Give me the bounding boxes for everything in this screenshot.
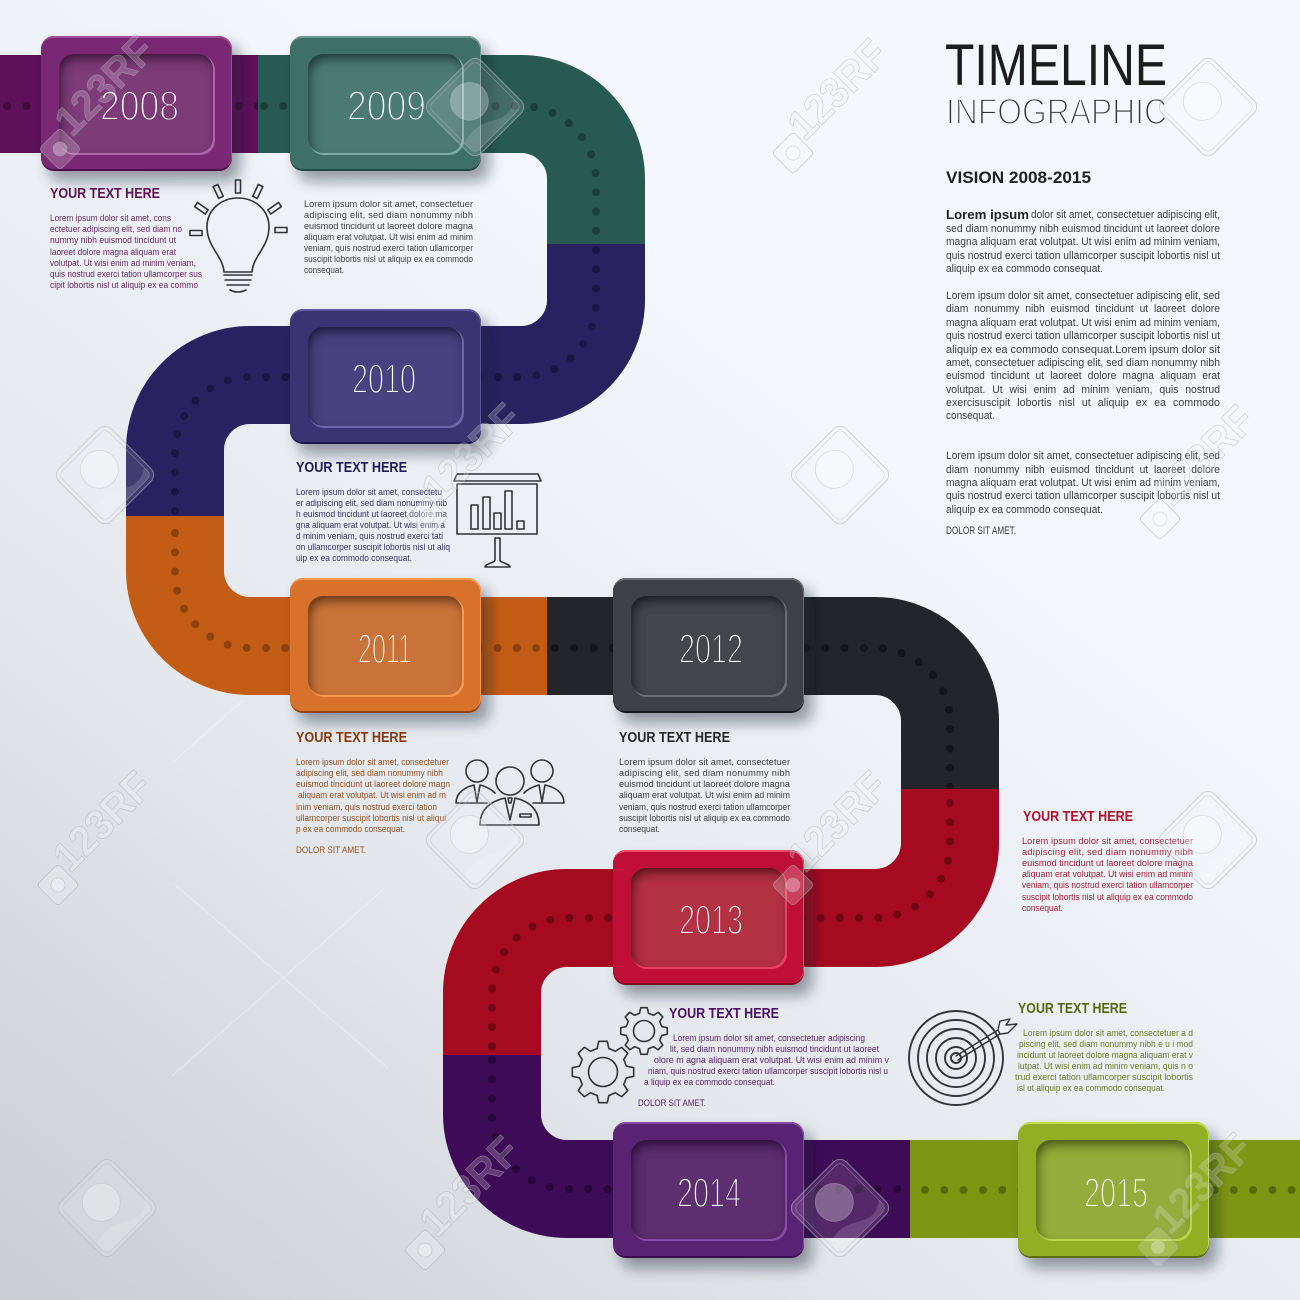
text block: vision second paragraph: diam nonummy nibh euismod tincidunt ut laoreet dolore	[946, 303, 1220, 315]
text block: 2010: uip ex ea commodo consequat.	[296, 553, 412, 563]
text block: 2008: volutpat. Ut wisi enim ad minim veniam,	[50, 258, 196, 268]
text block: 2015: trud exerci tation ullamcorper suscipit lobortis	[1015, 1072, 1193, 1082]
text block: 2012: aliquam erat volutpat. Ut wisi enim ad minim	[619, 790, 790, 800]
text block: 2010	[296, 460, 450, 563]
text block: 2013 right: Lorem ipsum dolor sit amet, consectetuer	[1022, 836, 1193, 846]
text block: 2012	[619, 730, 791, 834]
text block: vision second paragraph: magna aliquam erat volutpat. Ut wisi enim ad minim veniam,	[946, 317, 1220, 329]
text block: 2011: p ex ea commodo consequat.	[296, 824, 405, 834]
text block: 2009: adipiscing elit, sed diam nonummy nibh	[304, 210, 473, 220]
text block: 2010: h euismod tincidunt ut laoreet dolore ma	[296, 509, 448, 519]
watermark: 123RF logos: 123RF	[45, 26, 163, 144]
text block: 2015	[1015, 1001, 1193, 1093]
card: 2012	[613, 578, 804, 713]
segment: 2008 band	[0, 104, 258, 106]
text block: 2008: ectetuer adipiscing elit, sed diam no	[50, 224, 182, 234]
text block: vision second paragraph	[946, 290, 1220, 422]
text block: vision second paragraph: amet, consectetuer adipiscing elit, sed diam nonummy nibh	[946, 357, 1220, 369]
card: 2011: 2011	[358, 625, 412, 672]
text block: 2013 right: adipiscing elit, sed diam nonummy nibh	[1022, 847, 1193, 857]
text block: vision third paragraph	[946, 450, 1220, 537]
text block: 2015: lutpat. Ut wisi enim ad minim veniam, quis n o	[1018, 1061, 1193, 1071]
text block: 2008: laoreet dolore magna aliquam erat	[50, 247, 176, 257]
card: 2015	[1018, 1122, 1209, 1258]
text block: 2011: ullamcorper suscipit lobortis nisl ut aliqui	[296, 813, 446, 823]
text block: 2014: lit, sed diam nonummy nibh euismod tincidunt ut laoreet	[670, 1044, 879, 1054]
text block: vision third paragraph: DOLOR SIT AMET.	[946, 525, 1016, 537]
text block: 2015: incidunt ut laoreet dolore magna aliquam erat v	[1017, 1050, 1193, 1060]
text block: vision third paragraph: magna aliquam erat volutpat. Ut wisi enim ad minim veniam,	[946, 477, 1220, 489]
text block: vision second paragraph: quis nostrud exerci tation ullamcorper suscipit lobortis nisl ut	[946, 330, 1220, 342]
text block: 2012: euismod tincidunt ut laoreet dolore magna	[619, 779, 791, 789]
text block: 2012: Lorem ipsum dolor sit amet, consectetuer	[619, 757, 790, 767]
text block: 2011: DOLOR SIT AMET.	[296, 845, 366, 855]
text block: 2011	[296, 730, 450, 855]
text block: 2013 right: suscipit lobortis nisl ut aliquip ex ea commodo	[1022, 892, 1193, 902]
text block: vision intro: Lorem ipsum	[946, 207, 1029, 222]
text block: 2009: suscipit lobortis nisl ut aliquip ex ea commodo	[304, 254, 473, 264]
text block: 2015: Lorem ipsum dolor sit amet, consectetuer a d	[1023, 1028, 1193, 1038]
watermark: 123RF logos: 123RF	[43, 762, 161, 880]
text block: 2009: consequat.	[304, 265, 344, 275]
text block: 2009: euismod tincidunt ut laoreet dolore magna	[304, 221, 474, 231]
text block: 2010: er adipiscing elit, sed diam nonummy nib	[296, 498, 447, 508]
title	[945, 33, 1167, 132]
text block: 2009: veniam, quis nostrud exerci tation ullamcorper	[304, 243, 473, 253]
icon: team of people	[456, 760, 564, 825]
text block: 2010: d minim veniam, quis nostrud exerci tati	[296, 531, 443, 541]
card: 2008	[41, 36, 232, 171]
watermark: 123RF logos: 123RF	[778, 762, 896, 880]
text block: 2013 right: euismod tincidunt ut laoreet dolore magna	[1022, 858, 1194, 868]
card: 2013: 2013	[679, 896, 743, 943]
text block: 2014: DOLOR SIT AMET.	[638, 1098, 706, 1108]
icon: light bulb	[190, 180, 287, 292]
text block: vision second paragraph: euismod tincidunt ut laoreet dolore magna aliquam erat	[946, 370, 1220, 382]
segment: 2014 band	[492, 1055, 910, 1189]
text block: 2012: suscipit lobortis nisl ut aliquip ex ea commodo	[619, 813, 790, 823]
text block: 2012: veniam, quis nostrud exerci tation ullamcorper	[619, 802, 790, 812]
card: 2013	[613, 850, 804, 985]
text block: 2011: inim veniam, quis nostrud exerci tation	[296, 802, 437, 812]
text block: 2015: isl ut aliquip ex ea commodo consequat.	[1017, 1083, 1165, 1093]
text block: vision intro: dolor sit amet, consectetuer adipiscing elit,	[1031, 209, 1220, 221]
text block: 2008: YOUR TEXT HERE	[50, 186, 160, 202]
card: 2010	[290, 309, 481, 444]
text block: 2011: aliquam erat volutpat. Ut wisi enim ad m	[298, 790, 446, 800]
text block: 2014: Lorem ipsum dolor sit amet, consectetuer adipiscing	[673, 1033, 865, 1043]
segment: 2012 band	[547, 646, 950, 789]
title: INFOGRAPHIC	[946, 91, 1167, 132]
text block: vision third paragraph: Lorem ipsum dolor sit amet, consectetuer adipiscing elit, sed	[946, 450, 1220, 462]
text block: vision second paragraph: exercisuscipit lobortis nisl ut aliquip ex ea commodo	[946, 397, 1220, 409]
text block: 2015: YOUR TEXT HERE	[1018, 1001, 1127, 1017]
watermark: 123RF logos: 123RF	[778, 30, 896, 148]
text block: vision intro	[946, 207, 1220, 275]
watermark: 123RF logos: 123RF	[1143, 1124, 1261, 1242]
segment: 2013 band	[492, 789, 950, 1055]
text block: 2013 right: veniam, quis nostrud exerci tation ullamcorper	[1022, 880, 1193, 890]
card: 2010: 2010	[352, 355, 416, 402]
text block: vision second paragraph: Lorem ipsum dolor sit amet, consectetuer adipiscing elit, sed	[946, 290, 1220, 302]
title: TIMELINE	[945, 33, 1167, 98]
text block: 2014: a liquip ex ea commodo consequat.	[644, 1077, 775, 1087]
watermark: 123RF logos: 123RF	[412, 394, 530, 512]
text block: 2012: consequat.	[619, 824, 660, 834]
text block: vision second paragraph: consequat.	[946, 410, 995, 422]
icon: gears	[572, 1008, 667, 1103]
text block: vision third paragraph: diam nonummy nibh euismod tincidunt ut laoreet dolore	[946, 464, 1220, 476]
text block: 2012: YOUR TEXT HERE	[619, 730, 730, 746]
card: 2014	[613, 1122, 804, 1258]
text block: 2013 right: aliquam erat volutpat. Ut wisi enim ad minim	[1022, 869, 1193, 879]
card: 2015: 2015	[1084, 1169, 1148, 1216]
text block: 2009: Lorem ipsum dolor sit amet, consectetuer	[304, 199, 473, 209]
text block: 2013 right: YOUR TEXT HERE	[1023, 809, 1133, 825]
text block: 2008: nummy nibh euismod tincidunt ut	[50, 235, 176, 245]
text block: 2010: YOUR TEXT HERE	[296, 460, 407, 476]
segment: 2011 band	[175, 516, 547, 648]
card: 2009: 2009	[347, 82, 426, 129]
text block: 2009: aliquam erat volutpat. Ut wisi enim ad minim	[304, 232, 473, 242]
text block: 2014	[638, 1006, 889, 1108]
text block: 2008: cipit lobortis nisl ut aliquip ex ea commo	[50, 280, 198, 290]
segment: 2009 band	[258, 104, 596, 244]
text block: 2014: YOUR TEXT HERE	[669, 1006, 779, 1022]
text block: 2008: Lorem ipsum dolor sit amet, cons	[50, 213, 171, 223]
card: 2008: 2008	[100, 82, 179, 129]
text block: vision intro: magna aliquam erat volutpat. Ut wisi enim ad minim veniam,	[946, 236, 1220, 248]
text block: 2008	[50, 186, 202, 290]
watermark: 123RF logos: 123RF	[410, 1127, 528, 1245]
heading: vision: VISION 2008-2015	[946, 168, 1091, 187]
text block: vision second paragraph: aliquip ex ea commodo consequat.Lorem ipsum dolor sit	[946, 344, 1220, 356]
card: 2014: 2014	[677, 1169, 741, 1216]
text block: vision intro: sed diam nonummy nibh euismod tincidunt ut laoreet dolore	[946, 223, 1220, 235]
text block: 2008: quis nostrud exerci tation ullamcorper sus	[50, 269, 202, 279]
text block: 2011: Lorem ipsum dolor sit amet, consectetuer	[296, 757, 449, 767]
text block: 2010: gna aliquam erat volutpat. Ut wisi enim a	[296, 520, 446, 530]
text block: 2012: adipiscing elit, sed diam nonummy nibh	[619, 768, 790, 778]
text block: 2011: adipiscing elit, sed diam nonummy nibh	[296, 768, 443, 778]
text block: 2010: on ullamcorper suscipit lobortis nisl ut aliq	[296, 542, 450, 552]
text block: 2013 right: consequat.	[1022, 903, 1063, 913]
text block: 2015: piscing elit, sed diam nonummy nibh e u i mod	[1019, 1039, 1193, 1049]
text block: 2009	[304, 199, 474, 275]
icon: presentation chart	[454, 474, 541, 567]
card: 2012: 2012	[679, 625, 743, 672]
text block: vision intro: aliquip ex ea commodo consequat.	[946, 263, 1103, 275]
text block: vision third paragraph: quis nostrud exerci tation ullamcorper suscipit lobortis nisl ut	[946, 490, 1220, 502]
text block: vision intro: quis nostrud exerci tation ullamcorper suscipit lobortis nisl ut	[946, 250, 1220, 262]
text block: 2014: olore m agna aliquam erat volutpat. Ut wisi enim ad minim v	[654, 1055, 889, 1065]
watermark: 123RF logos: 123RF	[1145, 396, 1263, 514]
text block: 2010: Lorem ipsum dolor sit amet, consectetu	[296, 487, 442, 497]
text block: 2013 right	[1022, 809, 1194, 913]
text block: 2011: YOUR TEXT HERE	[296, 730, 407, 746]
text block: 2011: euismod tincidunt ut laoreet dolore magn	[296, 779, 450, 789]
text block: vision second paragraph: volutpat. Ut wisi enim ad minim veniam, quis nostrud	[946, 384, 1220, 396]
card: 2009	[290, 36, 481, 171]
text block: vision third paragraph: aliquip ex ea commodo consequat.	[946, 504, 1103, 516]
card: 2011	[290, 578, 481, 713]
segment: 2010 band	[175, 244, 596, 516]
segment: 2015 band	[910, 1189, 1300, 1190]
icon: target with arrow	[909, 1011, 1017, 1105]
text block: 2014: niam, quis nostrud exerci tation ullamcorper suscipit lobortis nisl u	[648, 1066, 888, 1076]
